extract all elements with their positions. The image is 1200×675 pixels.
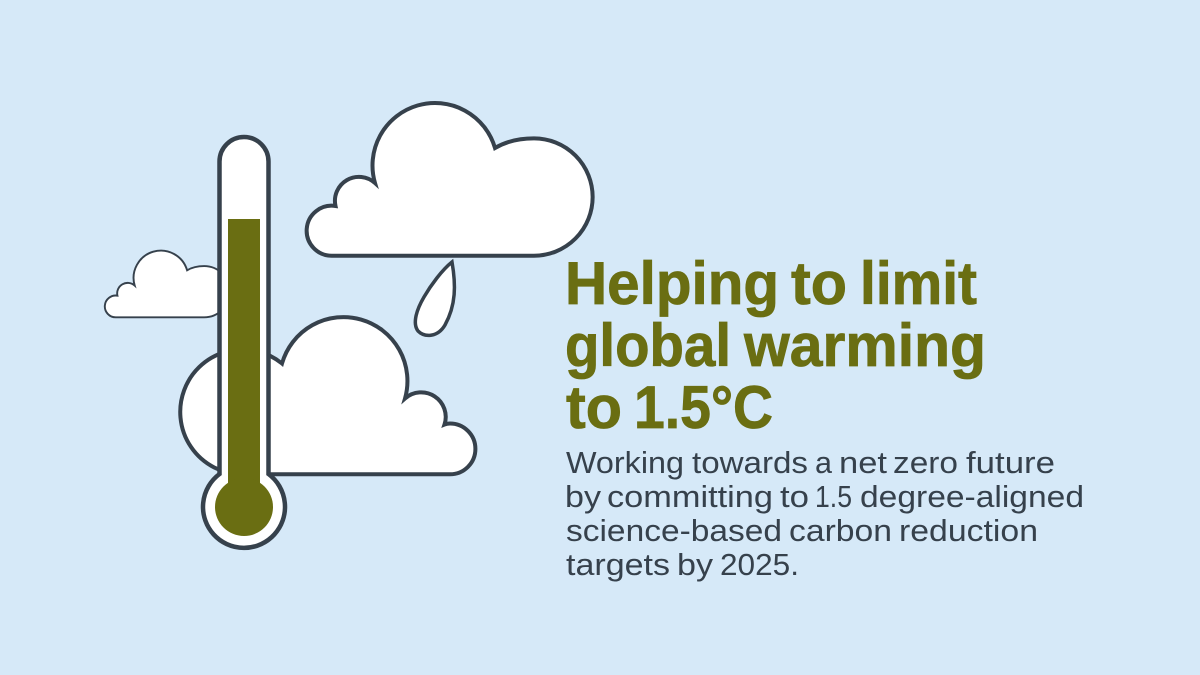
thermometer glass outline xyxy=(203,137,285,548)
body text: science-based xyxy=(566,513,782,548)
body text: Working xyxy=(566,445,684,480)
body text: net xyxy=(839,445,887,480)
body text: future xyxy=(966,445,1055,480)
icon: rain drop xyxy=(415,262,454,335)
thermometer mercury column xyxy=(228,219,260,489)
body text: by xyxy=(677,547,714,582)
heading: to xyxy=(791,250,847,317)
icon: thermometer xyxy=(203,137,285,548)
heading: Helping xyxy=(565,250,779,317)
heading xyxy=(565,250,986,441)
body text: degree-aligned xyxy=(860,479,1084,514)
heading: to xyxy=(566,374,622,441)
heading: global xyxy=(565,312,731,379)
body text: towards xyxy=(692,445,808,480)
body text: by xyxy=(565,479,602,514)
body text: a xyxy=(815,445,833,480)
body text: 1.5 xyxy=(815,479,852,514)
heading: warming xyxy=(743,312,986,379)
body text: targets xyxy=(566,547,670,582)
body text: reduction xyxy=(899,513,1038,548)
icon: lower cloud xyxy=(180,317,475,474)
heading: limit xyxy=(860,250,977,317)
heading: 1.5°C xyxy=(634,374,773,441)
body text: carbon xyxy=(789,513,892,548)
icon: large upper cloud xyxy=(307,103,593,256)
body text: to xyxy=(780,479,809,514)
thermometer mercury bulb xyxy=(215,478,273,536)
body text: 2025. xyxy=(720,547,799,582)
body text: zero xyxy=(893,445,958,480)
icon: small cloud xyxy=(105,251,230,317)
body text xyxy=(565,445,1084,582)
body text: committing xyxy=(607,479,773,514)
